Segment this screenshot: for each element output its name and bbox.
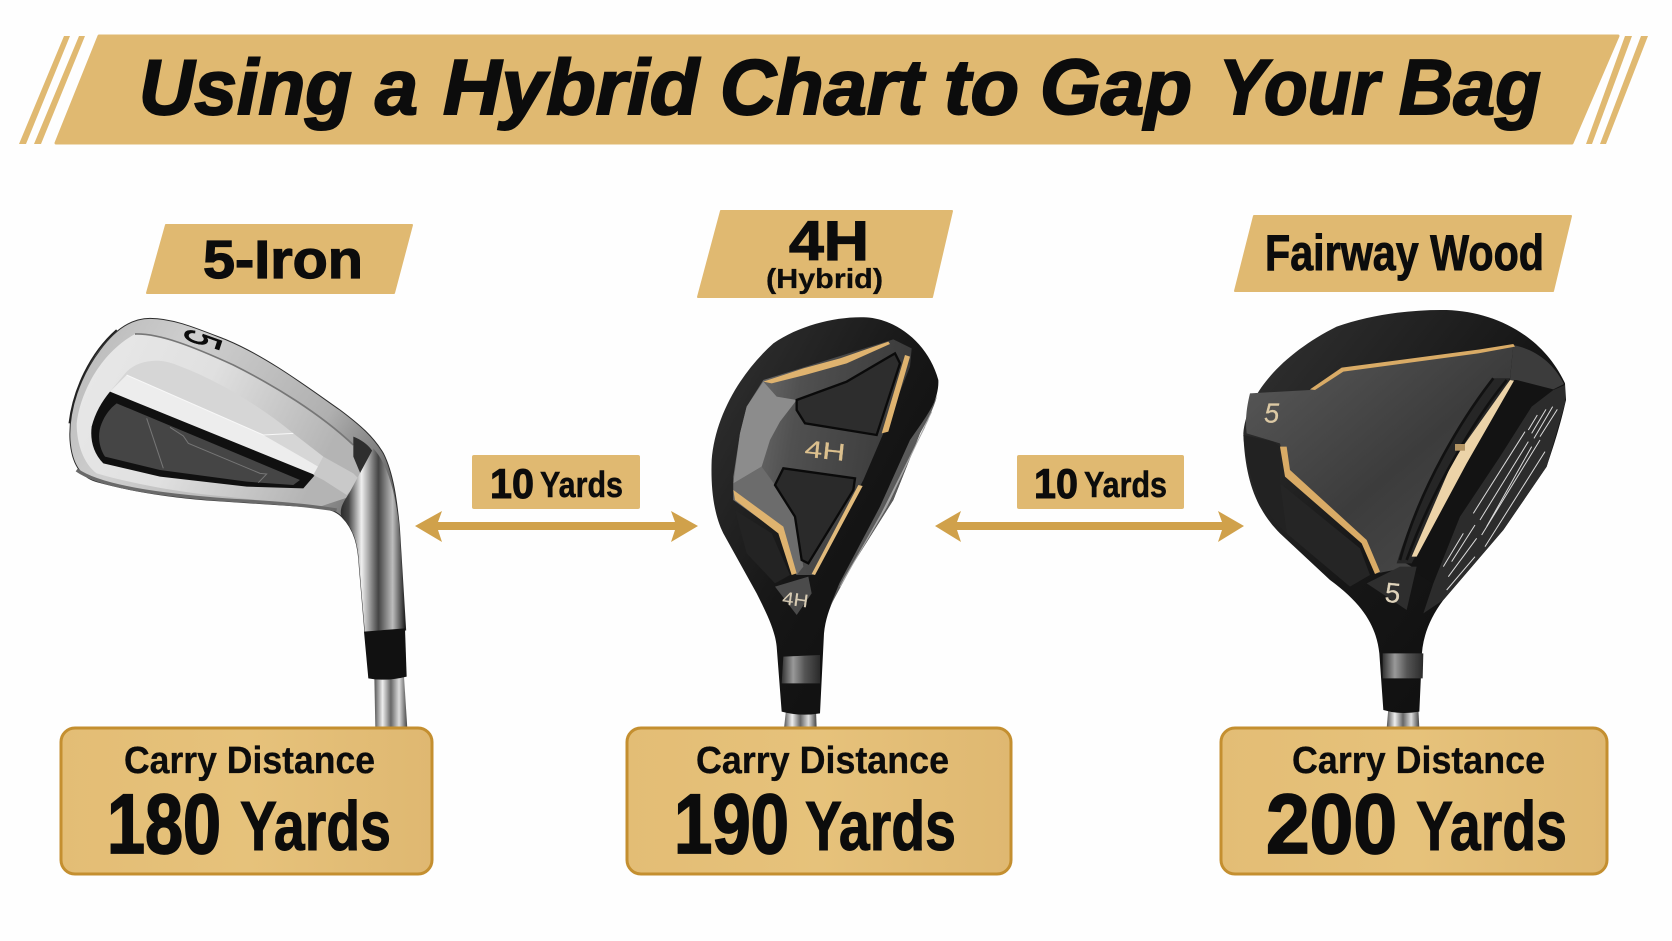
title text: Hybrid <box>443 43 700 131</box>
card: 4H carry distance: 190 <box>674 777 789 871</box>
label: 4H Hybrid: (Hybrid) <box>766 263 883 294</box>
icon: 4H hybrid club head: 4H <box>781 587 810 612</box>
card: 5-iron carry distance: Carry Distance <box>124 740 375 782</box>
card: 4H carry distance: Carry Distance <box>696 740 949 782</box>
card: 4H carry distance: Yards <box>805 787 956 865</box>
title text: Chart <box>720 43 926 131</box>
icon: 5-iron club head: 5 <box>172 324 234 356</box>
gap label: second 10 yards: Yards <box>1084 464 1167 505</box>
gap label: second 10 yards: 10 <box>1034 460 1078 507</box>
card: fairway wood carry distance: Carry Distance <box>1292 740 1545 782</box>
card: 4H carry distance <box>627 728 1011 874</box>
title text: Bag <box>1399 43 1541 131</box>
arrow: 4H to fairway wood <box>935 511 1244 542</box>
icon: fairway wood club head: 5 <box>1383 577 1402 609</box>
label: Fairway Wood: Fairway Wood <box>1265 225 1544 281</box>
label: 4H Hybrid <box>698 209 952 297</box>
title text <box>139 43 1541 131</box>
icon: 4H hybrid club head <box>711 317 938 728</box>
gap label: first 10 yards: 10 <box>490 460 534 507</box>
title text: Gap <box>1040 43 1192 131</box>
gap label: first 10 yards: Yards <box>540 464 623 505</box>
title text: Using <box>139 43 352 131</box>
label: 4H Hybrid: 4H <box>789 209 869 272</box>
arrow: 5-iron to 4H <box>415 511 698 542</box>
card: 5-iron carry distance <box>61 728 432 874</box>
gap label: first 10 yards <box>472 455 640 509</box>
card: fairway wood carry distance: Yards <box>1416 787 1567 865</box>
gap label: second 10 yards <box>1017 455 1184 509</box>
title banner <box>19 36 1648 144</box>
icon: 4H hybrid club head: 4H <box>803 436 847 467</box>
label: 5-Iron <box>147 225 412 293</box>
title text: Your <box>1219 43 1382 131</box>
icon: fairway wood club head: 5 <box>1264 398 1280 429</box>
title text: to <box>944 43 1019 131</box>
label: 5-Iron: 5-Iron <box>203 230 363 290</box>
title text: a <box>375 43 418 131</box>
card: 5-iron carry distance: Yards <box>240 787 391 865</box>
label: Fairway Wood <box>1235 216 1571 291</box>
card: fairway wood carry distance: 200 <box>1266 777 1397 871</box>
icon: 5-iron club head <box>69 318 407 728</box>
card: fairway wood carry distance <box>1221 728 1607 874</box>
card: 5-iron carry distance: 180 <box>107 777 221 871</box>
icon: fairway wood club head <box>1243 310 1566 728</box>
